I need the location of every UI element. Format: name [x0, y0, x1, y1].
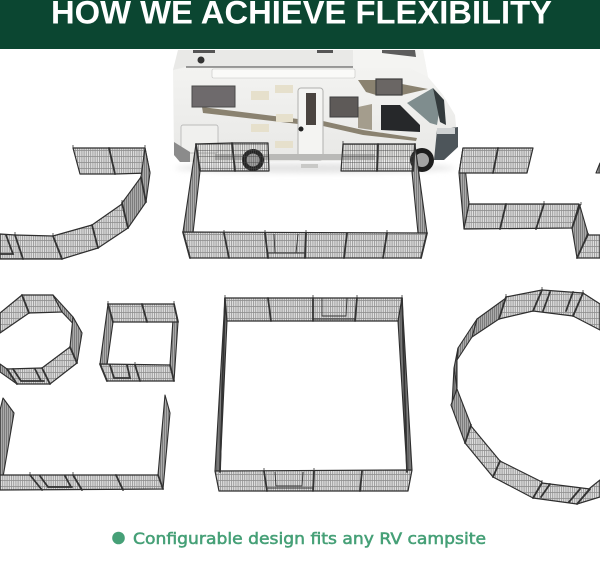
header band: [0, 0, 600, 49]
fence layout: RV enclosure: [183, 141, 427, 258]
fence layout: right-hand stepped run: [459, 148, 600, 258]
fence layout: large circle: [451, 287, 600, 504]
fence layout: small square: [100, 301, 178, 381]
fence layout: large central square: [215, 295, 412, 491]
fence layout: open-sided run bottom left: [0, 395, 170, 490]
RV motorhome illustration: [173, 50, 458, 173]
fence layout: top-left curved run: [0, 145, 150, 259]
caption bullet: [112, 532, 125, 544]
caption: [112, 529, 486, 548]
caption text: Configurable design fits any RV campsite: [133, 529, 486, 548]
fence layout: octagon: [0, 295, 82, 384]
